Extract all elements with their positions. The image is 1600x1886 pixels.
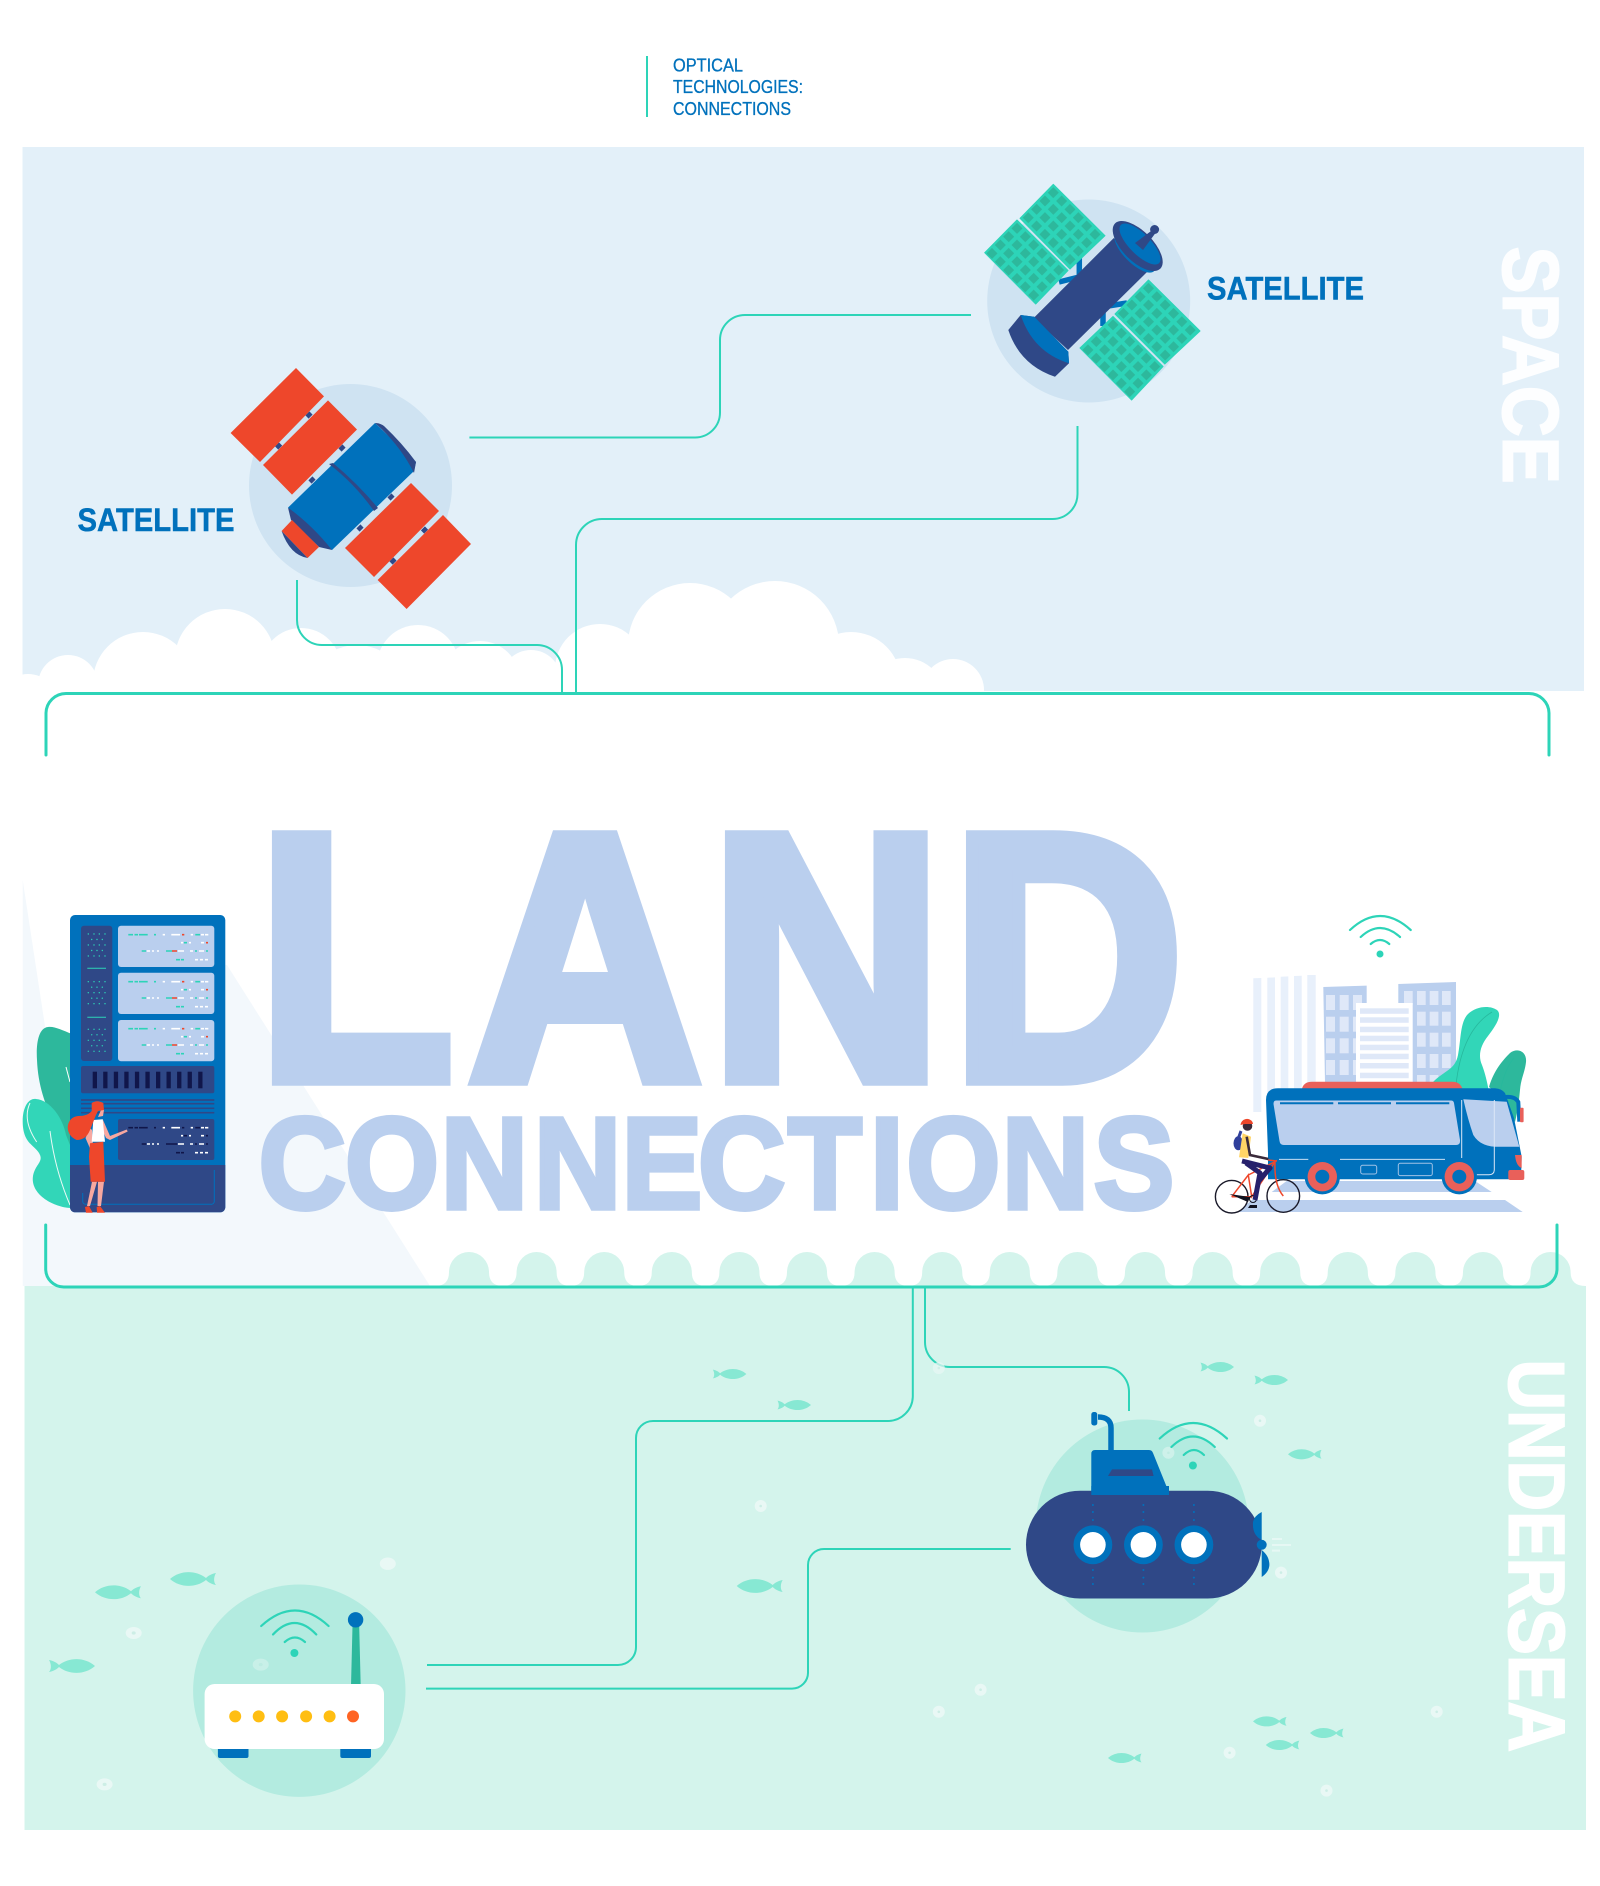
vertical label: SPACE: SPACE [1487, 247, 1575, 484]
status LEDs [229, 1710, 359, 1722]
heading: CONNECTIONS: CONNECTIONS [259, 1090, 1174, 1236]
portholes [1074, 1525, 1112, 1564]
hull [1026, 1491, 1262, 1598]
status column [81, 926, 112, 1061]
side window [1274, 1100, 1460, 1145]
label: satellite left: SATELLITE [78, 502, 234, 538]
top label: optical technologies connections: OPTICAL [673, 55, 743, 75]
right plants [1433, 1007, 1526, 1122]
conning tower [1091, 1450, 1169, 1495]
bubbles [97, 1362, 1443, 1797]
satellite body [1034, 238, 1147, 350]
satellite: red panels, blue body [231, 368, 471, 609]
dish [1108, 225, 1162, 279]
wheels [1305, 1159, 1340, 1194]
vent band [81, 1066, 214, 1093]
router body [205, 1684, 384, 1749]
top label: optical technologies connections: CONNECTIONS [673, 99, 791, 119]
backdrop circle [193, 1584, 406, 1797]
front window [1463, 1099, 1519, 1147]
router [193, 1584, 406, 1797]
satellite body [288, 423, 416, 550]
submarine [1026, 1412, 1291, 1632]
panel: space background [22, 147, 1584, 691]
satellite: green panels, navy body [985, 184, 1200, 402]
solar panels [985, 184, 1200, 400]
light panels [118, 926, 214, 967]
feet [218, 1745, 248, 1758]
wifi signal [1160, 1423, 1227, 1470]
fish school [49, 1362, 1344, 1763]
woman pointing at server [68, 1101, 128, 1213]
backdrop circle [249, 384, 452, 587]
server rack [70, 915, 225, 1212]
panel struts [277, 413, 426, 563]
connector lines [297, 315, 1129, 1689]
left plants [23, 1027, 72, 1208]
wifi signal [261, 1610, 329, 1657]
road stripes [1238, 1181, 1523, 1212]
label: satellite right: SATELLITE [1207, 270, 1364, 306]
backdrop circle [987, 200, 1190, 402]
clouds [0, 581, 1600, 791]
heading: LAND: LAND [257, 762, 1184, 1154]
icon: wifi over city [1350, 916, 1411, 958]
vertical label: UNDERSEA: UNDERSEA [1492, 1360, 1580, 1752]
bottom land bracket [46, 1225, 1557, 1287]
top land bracket [46, 694, 1549, 755]
periscope [1098, 1417, 1111, 1452]
top label: optical technologies connections [647, 55, 803, 119]
base [1008, 315, 1069, 377]
panel cell grid [985, 184, 1200, 400]
bus [1266, 1082, 1524, 1194]
city buildings [1253, 975, 1456, 1112]
dark panel [118, 1119, 214, 1160]
land background mountain [23, 880, 430, 1286]
blue struts [1059, 258, 1127, 326]
cyclist [1215, 1119, 1300, 1213]
top label: optical technologies connections: TECHNOLOGIES: [673, 77, 803, 97]
panel: undersea background [24, 1252, 1586, 1830]
antenna [351, 1626, 361, 1686]
solar panels [231, 368, 471, 609]
propeller [1253, 1512, 1269, 1577]
backdrop circle [1036, 1420, 1249, 1632]
